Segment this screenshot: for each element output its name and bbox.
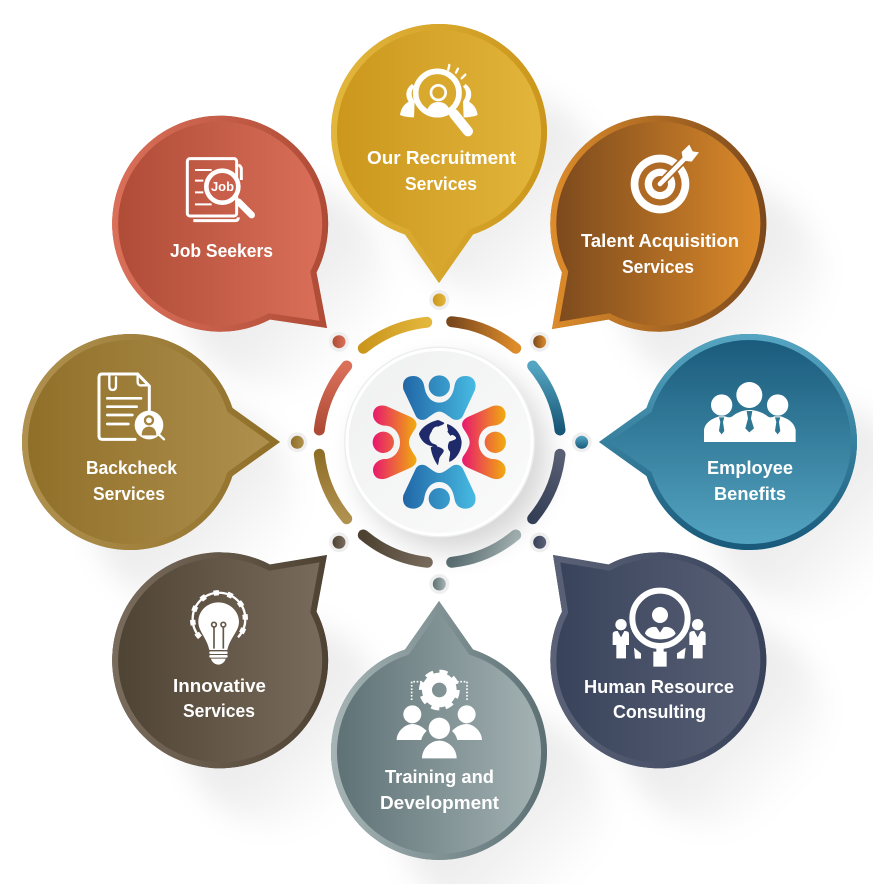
- label: our recruitment services: Services: [405, 174, 477, 194]
- panel: human resource consulting: [550, 552, 766, 768]
- panel: talent acquisition services: [550, 116, 766, 332]
- panel: backcheck services: [22, 334, 280, 550]
- panel: our recruitment services: [331, 24, 547, 283]
- icon: target with arrow: [631, 145, 699, 213]
- label: job: Job: [211, 179, 234, 194]
- logo: people around globe: [373, 375, 506, 509]
- label: talent acquisition services: Services: [622, 257, 694, 277]
- logo: left figure: [373, 406, 417, 479]
- label: human resource consulting: Consulting: [613, 702, 706, 722]
- logo: globe: [419, 420, 462, 465]
- icon: magnifier with people: [613, 591, 706, 667]
- label: job seekers: Job Seekers: [170, 241, 273, 261]
- icon: magnifier over person: [400, 65, 478, 131]
- label: human resource consulting: Human Resource: [584, 677, 734, 697]
- icon: gear and team: [397, 672, 482, 758]
- icon: light bulb with gear: [193, 593, 245, 665]
- label: employee benefits: Employee: [707, 458, 793, 478]
- logo: top figure: [403, 375, 476, 420]
- icon: job document magnifier: [187, 159, 252, 221]
- label: backcheck services: Backcheck: [86, 458, 178, 478]
- label: innovative services: Innovative: [173, 676, 266, 696]
- ring segments: [319, 322, 560, 562]
- label: employee benefits: Benefits: [714, 484, 786, 504]
- panel: training and development: [331, 601, 547, 860]
- label: innovative services: Services: [183, 701, 255, 721]
- logo: right figure: [462, 406, 506, 479]
- connector dots: [287, 290, 592, 594]
- panel: innovative services: [112, 552, 328, 768]
- logo: bottom figure: [403, 465, 476, 509]
- icon: document with person search: [99, 374, 164, 439]
- panel: job seekers: [112, 116, 328, 332]
- label: training and development: Development: [380, 793, 499, 813]
- label: talent acquisition services: Talent Acquisition: [581, 231, 739, 251]
- label: backcheck services: Services: [93, 484, 165, 504]
- panel: employee benefits: [599, 334, 857, 550]
- icon: three business people: [704, 382, 796, 442]
- label: training and development: Training and: [385, 767, 494, 787]
- center disc with logo: [344, 346, 547, 551]
- label: our recruitment services: Our Recruitment: [367, 148, 516, 168]
